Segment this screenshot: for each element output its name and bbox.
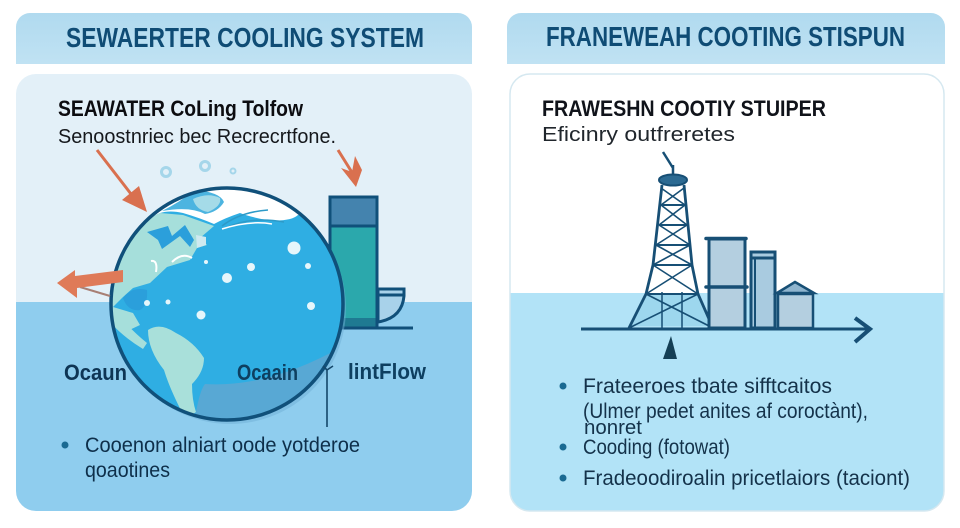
panel: seawater header [16, 13, 472, 64]
icon: globe bubbles [144, 242, 315, 320]
arrow: outflow left [57, 270, 123, 298]
arrow: inflow right [338, 150, 362, 187]
bullet list: seawater notes: qoaotines [85, 459, 170, 482]
label: inflow: lintFlow [348, 359, 427, 384]
arrow: ground flow [581, 318, 870, 342]
text: seawater description: Senoostnriec bec Recrecrtfone. [58, 126, 336, 148]
icon: bubbles [162, 162, 236, 176]
icon: small building [777, 282, 814, 328]
label: ocean left: Ocaun [64, 360, 127, 385]
subheading: seawater inflow: SEAWATER CoLing Tolfow [58, 96, 304, 121]
bullet list: freshwater notes: Fradeoodiroalin pricetlaiors (taciont) [583, 467, 910, 490]
bullet list: seawater notes [62, 434, 360, 482]
heading: seawater cooling system: SEWAERTER COOLING SYSTEM [66, 22, 424, 53]
arrow: up marker [663, 336, 677, 359]
bullet list: freshwater notes [560, 375, 910, 490]
icon: lattice tower [629, 152, 713, 328]
bullet list: freshwater notes: (Ulmer pedet anites af coroctànt), [583, 400, 868, 423]
panel: freshwater header [507, 13, 945, 64]
subheading: freshwater cooling: FRAWESHN COOTIY STUIPER [542, 96, 826, 121]
label: ocean centre: Ocaain [237, 360, 298, 385]
icon: storage tank tall [751, 252, 775, 328]
bullet list: freshwater notes: nonret [584, 417, 642, 439]
text: efficiency description: Eficinry outfreretes [542, 124, 735, 146]
icon: storage tank large [706, 238, 747, 328]
leader line [323, 366, 333, 427]
panel: seawater system [16, 74, 472, 511]
arrow: inflow left [97, 150, 147, 212]
bullet list: seawater notes: Coоenon alniart oode yotderoe [85, 434, 360, 457]
icon: intake tower [330, 197, 413, 328]
icon: globe [105, 180, 346, 430]
panel: freshwater system [510, 74, 944, 511]
bullet list: freshwater notes: Cooding (fotowat) [583, 436, 730, 459]
bullet list: freshwater notes: Frateeroes tbate sifftcaitos [583, 375, 832, 398]
